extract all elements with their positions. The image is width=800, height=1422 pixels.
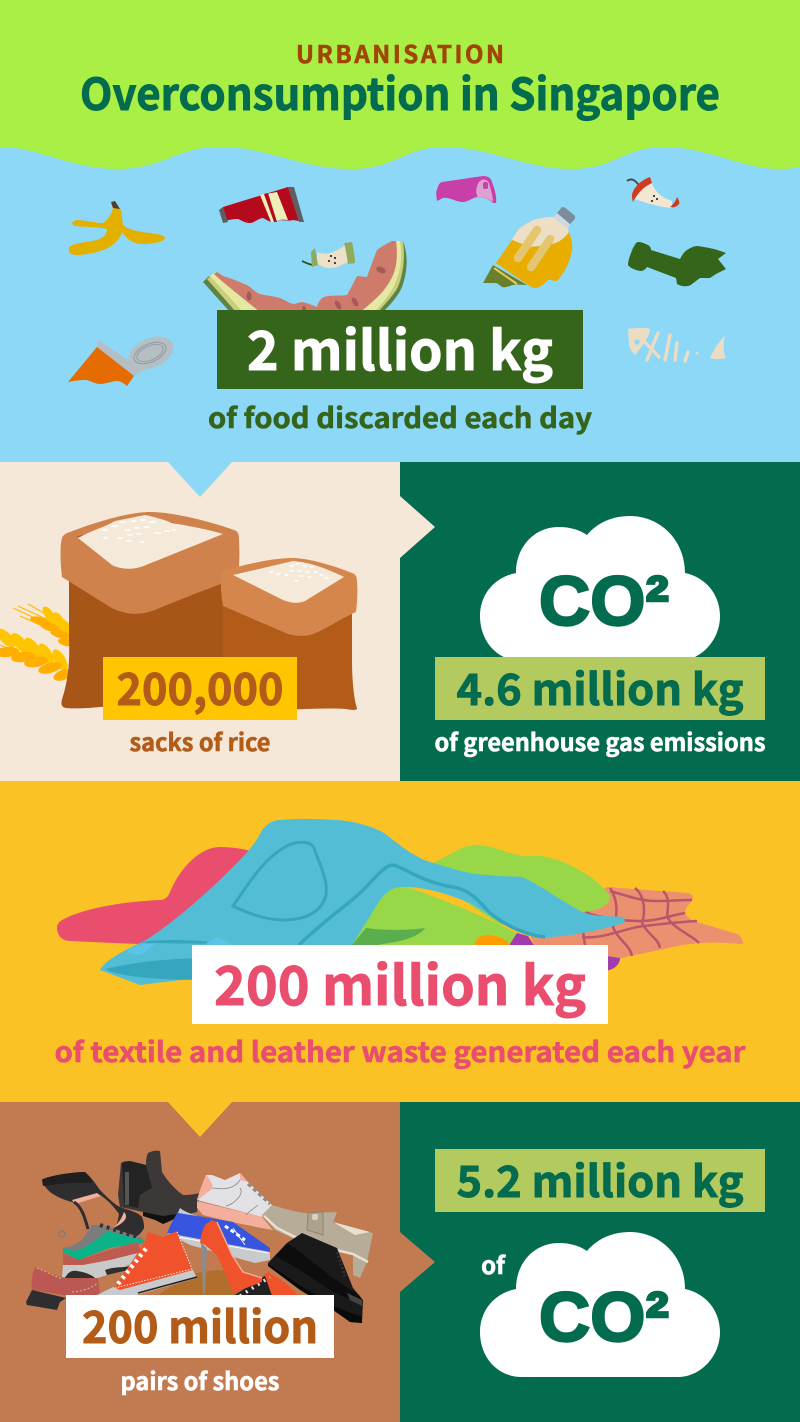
shoe: orange heel [200, 1220, 262, 1293]
panel: food waste [0, 147, 800, 462]
stat box: 200 million kg: 200 million kg [214, 942, 586, 1021]
panel: shoes [0, 1102, 400, 1422]
pointer from rice panel [400, 496, 435, 558]
header background [0, 0, 800, 200]
panel: shoe emissions [400, 1102, 800, 1422]
text: of food discarded each day: of food discarded each day [208, 397, 592, 437]
stat box: 200,000: 200,000 [116, 654, 284, 718]
icon: red apple core [627, 177, 679, 208]
icon: pile of textiles [57, 819, 743, 985]
icon: oil bottle [483, 207, 575, 288]
pointer from textile panel [168, 1102, 232, 1137]
pointer from shoes panel [400, 1232, 435, 1292]
icon: large rice sack [60, 512, 239, 708]
icon: green apple core [302, 242, 355, 268]
text: of: of [481, 1246, 506, 1281]
shoe: brown shoe [157, 1270, 250, 1296]
shoe: red oxford [26, 1267, 100, 1310]
text: pairs of shoes: pairs of shoes [120, 1362, 280, 1397]
icon: watermelon rind [203, 241, 407, 312]
icon: red tube [219, 187, 304, 223]
icon: cloud with CO2: CO² [539, 1278, 669, 1356]
icon: cloud with CO2 [480, 1232, 720, 1377]
icon: green bottle [628, 242, 726, 286]
stat box: 200 million: 200 million [82, 1292, 318, 1356]
icon: pink container [436, 176, 496, 203]
stat box: 5.2 million kg: 5.2 million kg [456, 1148, 744, 1210]
panel: food emissions [400, 462, 800, 781]
panel background [0, 1102, 400, 1422]
panel: rice [0, 462, 400, 781]
text: of greenhouse gas emissions: of greenhouse gas emissions [434, 723, 766, 758]
shoe: orange high-top [97, 1231, 197, 1296]
icon: fish bones [628, 328, 726, 361]
icon: banana peel [69, 201, 165, 255]
icon: small rice sack [221, 558, 357, 712]
stat box: 2 million kg: 2 million kg [247, 307, 553, 386]
shoe: chelsea boot [118, 1151, 200, 1224]
panel background [0, 462, 400, 781]
panel: textile waste [0, 781, 800, 1102]
wavy sky background [0, 147, 800, 462]
kicker: urbanisation: URBANISATION [296, 35, 504, 70]
shoe: black platform [268, 1233, 363, 1323]
text: sacks of rice: sacks of rice [130, 723, 270, 758]
shoe: white sneaker [197, 1173, 273, 1230]
shoe: beige loafer [262, 1205, 373, 1278]
shoe: black stiletto [42, 1172, 144, 1237]
shoe: far sneaker [233, 1272, 299, 1296]
panel background [400, 462, 800, 781]
title: Overconsumption in Singapore [80, 59, 720, 123]
icon: opened can [68, 331, 178, 386]
pointer from food panel [168, 462, 232, 497]
shoe: green chunky sneaker [59, 1225, 145, 1278]
panel background [0, 781, 800, 1102]
stat box: 4.6 million kg: 4.6 million kg [456, 656, 744, 718]
icon: pile of shoes [26, 1151, 373, 1323]
panel background [400, 1102, 800, 1422]
icon: wheat [0, 604, 76, 683]
shoe: blue sneaker [167, 1208, 270, 1263]
icon: cloud with CO2 [480, 516, 720, 661]
text: of textile and leather waste: of textile and leather waste generated each year [54, 1031, 746, 1071]
icon: cloud with CO2: CO² [539, 562, 669, 640]
